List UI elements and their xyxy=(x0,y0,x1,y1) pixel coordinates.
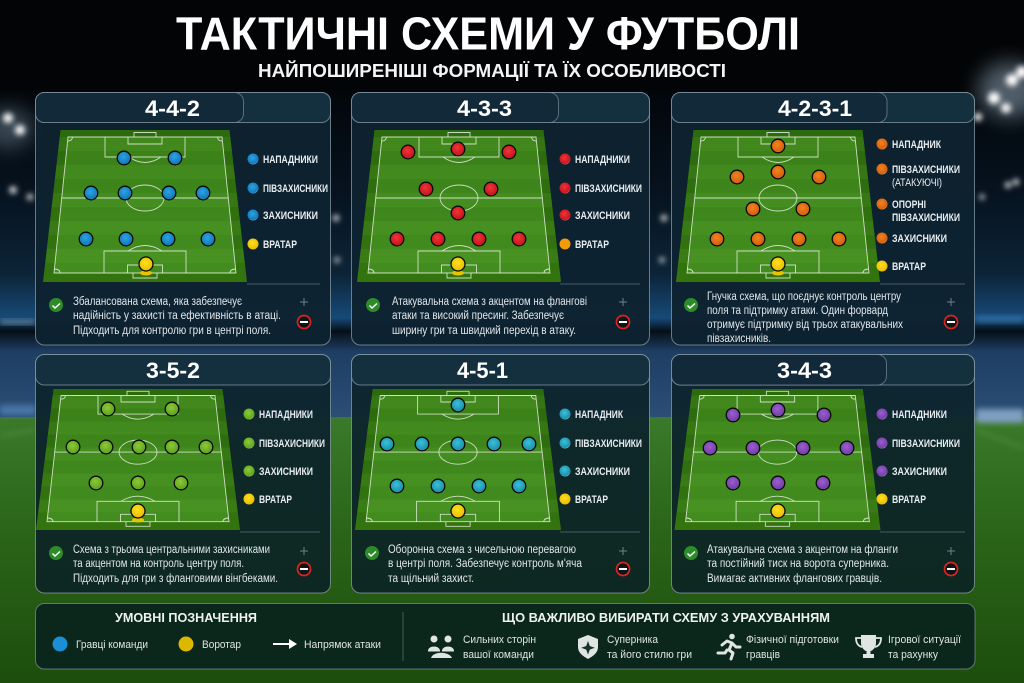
legend: attack direction arrow: Напрямок атаки xyxy=(304,639,381,651)
legend: 4-5-1: НАПАДНИК xyxy=(575,409,623,421)
legend: 4-2-3-1 xyxy=(876,138,960,273)
description: 4-5-1: Оборонна схема з чисельною перевагою xyxy=(388,544,576,556)
legend: attack direction arrow xyxy=(273,639,381,651)
legend: 4-5-1 xyxy=(560,408,642,506)
legend: 3-4-3: ЗАХИСНИКИ xyxy=(892,466,947,478)
pitch: 3-4-3 xyxy=(666,389,889,530)
legend heading: УМОВНІ ПОЗНАЧЕННЯ xyxy=(115,610,257,625)
pitch: 4-5-1 xyxy=(347,389,569,530)
header: 4-2-3-1 xyxy=(672,92,887,122)
header: 4-3-3: 4-3-3 xyxy=(457,96,512,121)
legend: 3-5-2 xyxy=(244,408,325,506)
header: 3-4-3 xyxy=(672,354,886,385)
description: 3-4-3: Атакувальна схема з акцентом на фланги xyxy=(707,544,898,556)
description: 4-3-3: ширину гри та швидкий перехід в атаку. xyxy=(392,325,576,337)
legend: 4-2-3-1: ЗАХИСНИКИ xyxy=(892,233,947,245)
description: 4-2-3-1: поля та підтримку атаки. Один форвард xyxy=(707,305,888,317)
text: opponent xyxy=(607,634,692,661)
description: 3-4-3: та постійний тиск на ворота суперника. xyxy=(707,558,889,570)
panel: 3-4-3 xyxy=(666,354,974,593)
legend: goalkeeper: Воротар xyxy=(202,639,241,651)
subtitle: НАЙПОШИРЕНІШІ ФОРМАЦІЇ ТА ЇХ ОСОБЛИВОСТІ xyxy=(258,60,726,81)
legend: 3-5-2: ВРАТАР xyxy=(259,494,292,506)
legend: 4-2-3-1: ПІВЗАХИСНИКИ xyxy=(892,164,960,176)
text: team strengths: Сильних сторін xyxy=(463,634,536,646)
legend: 3-4-3: НАПАДНИКИ xyxy=(892,409,947,421)
text: physical fitness: гравців xyxy=(746,649,780,661)
legend: 4-5-1: ПІВЗАХИСНИКИ xyxy=(575,438,642,450)
legend: 4-2-3-1: НАПАДНИК xyxy=(892,139,941,151)
plus and minus icons xyxy=(944,298,958,328)
header: 4-2-3-1: 4-2-3-1 xyxy=(778,96,852,121)
bottom bar xyxy=(36,604,975,669)
description: 4-4-2 xyxy=(49,296,281,337)
description: 4-3-3 xyxy=(366,296,587,337)
header: 4-3-3 xyxy=(352,92,558,122)
panel: 4-2-3-1 xyxy=(668,92,974,345)
legend: 3-4-3: ВРАТАР xyxy=(892,494,926,506)
header: 3-4-3: 3-4-3 xyxy=(777,358,832,383)
title: ТАКТИЧНІ СХЕМИ У ФУТБОЛІ xyxy=(176,8,800,60)
legend: 4-3-3: ПІВЗАХИСНИКИ xyxy=(575,183,642,195)
header: 4-4-2 xyxy=(36,92,244,122)
legend: 3-5-2: ПІВЗАХИСНИКИ xyxy=(259,438,325,450)
description: 4-4-2: Збалансована схема, яка забезпечує xyxy=(73,296,242,308)
legend: team players: Гравці команди xyxy=(76,639,148,651)
panel: 4-4-2 xyxy=(35,92,330,345)
header: 3-5-2: 3-5-2 xyxy=(146,358,200,383)
pitch: 4-4-2 xyxy=(35,130,255,282)
description: 4-5-1: та щільний захист. xyxy=(388,573,474,585)
description: 4-3-3: Атакувальна схема з акцентом на флангові xyxy=(392,296,587,308)
legend: 3-4-3: ПІВЗАХИСНИКИ xyxy=(892,438,960,450)
text: physical fitness xyxy=(746,634,839,661)
description: 3-5-2: Підходить для гри з фланговими вінгбеками. xyxy=(73,573,278,585)
description: 4-5-1: в центрі поля. Забезпечує контроль м'яча xyxy=(388,558,583,570)
legend: goalkeeper xyxy=(178,636,241,652)
text: team strengths: вашої команди xyxy=(463,649,534,661)
description: 4-4-2: Підходить для контролю гри в центрі поля. xyxy=(73,325,271,337)
icon: team xyxy=(428,636,454,658)
legend: 4-3-3: НАПАДНИКИ xyxy=(575,154,630,166)
legend: 4-4-2: ВРАТАР xyxy=(263,239,297,251)
description: 4-2-3-1: Гнучка схема, що поєднує контроль центру xyxy=(707,291,901,303)
plus and minus icons xyxy=(298,298,310,328)
legend: 4-2-3-1: ПІВЗАХИСНИКИ xyxy=(892,212,960,224)
considerations heading: ЩО ВАЖЛИВО ВИБИРАТИ СХЕМУ З УРАХУВАННЯМ xyxy=(502,610,830,625)
plus and minus icons xyxy=(944,547,958,576)
pitch: 4-2-3-1 xyxy=(668,130,888,282)
header: 4-4-2: 4-4-2 xyxy=(145,96,200,121)
description: 4-4-2: надійність у захисті та ефективність в атаці. xyxy=(73,310,281,322)
plus and minus icons xyxy=(298,547,310,576)
legend: 4-2-3-1: ОПОРНІ xyxy=(892,199,926,211)
legend: 3-4-3 xyxy=(876,408,960,506)
legend: 4-5-1: ВРАТАР xyxy=(575,494,608,506)
description: 3-5-2: та акцентом на контроль центру поля. xyxy=(73,558,244,570)
description: 3-4-3 xyxy=(684,544,898,585)
panel: 4-3-3 xyxy=(349,92,650,345)
description: 4-2-3-1 xyxy=(684,291,903,345)
legend: 4-4-2 xyxy=(248,154,328,251)
legend: 4-4-2: НАПАДНИКИ xyxy=(263,154,318,166)
legend: team players xyxy=(52,636,148,652)
plus and minus icons xyxy=(616,298,630,328)
legend: 4-4-2: ЗАХИСНИКИ xyxy=(263,210,318,222)
plus and minus icons xyxy=(616,547,630,576)
legend: 4-3-3: ЗАХИСНИКИ xyxy=(575,210,630,222)
legend: 4-2-3-1: ВРАТАР xyxy=(892,261,926,273)
pitch: 4-3-3 xyxy=(349,130,569,282)
text: game situation: Ігрової ситуації xyxy=(888,634,961,646)
panel: 3-5-2 xyxy=(28,354,330,593)
legend: 4-2-3-1: (АТАКУЮЧІ) xyxy=(892,177,942,189)
text: game situation xyxy=(888,634,961,661)
legend: 4-3-3: ВРАТАР xyxy=(575,239,609,251)
text: game situation: та рахунку xyxy=(888,649,938,661)
description: 3-5-2 xyxy=(49,544,278,585)
description: 4-5-1 xyxy=(365,544,583,585)
text: team strengths xyxy=(463,634,536,661)
legend: 4-3-3 xyxy=(560,154,642,251)
description: 3-5-2: Схема з трьома центральними захисниками xyxy=(73,544,270,556)
text: physical fitness: Фізичної підготовки xyxy=(746,634,839,646)
icon: shield xyxy=(578,635,598,659)
legend: 4-4-2: ПІВЗАХИСНИКИ xyxy=(263,183,328,195)
text: opponent: та його стилю гри xyxy=(607,649,692,661)
legend: 3-5-2: ЗАХИСНИКИ xyxy=(259,466,313,478)
legend: 3-5-2: НАПАДНИКИ xyxy=(259,409,313,421)
text: opponent: Суперника xyxy=(607,634,659,646)
legend: 4-5-1: ЗАХИСНИКИ xyxy=(575,466,630,478)
description: 3-4-3: Вимагає активних флангових гравців. xyxy=(707,573,882,585)
pitch: 3-5-2 xyxy=(28,389,248,530)
icon: trophy xyxy=(856,635,881,658)
description: 4-3-3: атаки та високий пресинг. Забезпечує xyxy=(392,310,564,322)
description: 4-2-3-1: півзахисників. xyxy=(707,333,771,345)
icon: runner xyxy=(718,634,740,659)
header: 4-5-1: 4-5-1 xyxy=(457,358,508,383)
panel: 4-5-1 xyxy=(347,354,650,593)
description: 4-2-3-1: отримує підтримку від трьох атакувальних xyxy=(707,319,903,331)
